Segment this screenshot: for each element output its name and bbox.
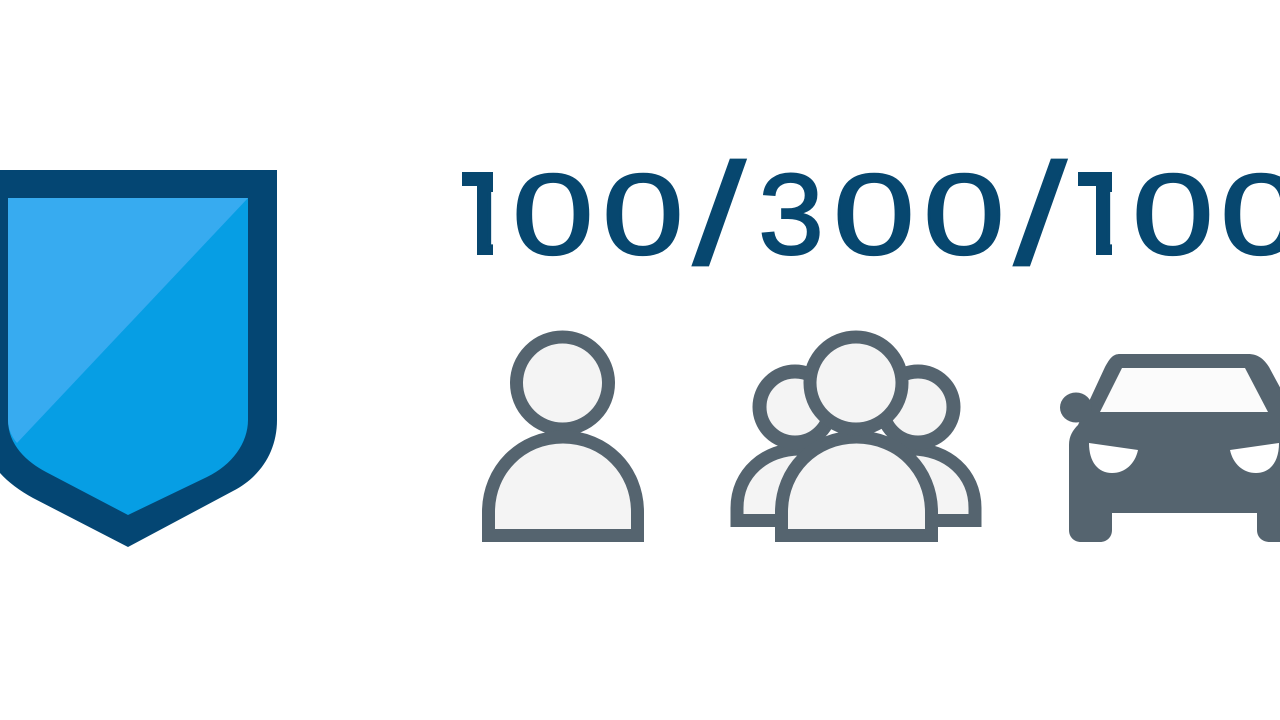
heading: coverage limits 100/300/100	[462, 158, 1280, 266]
heading: coverage limits 100/300/100: 1	[411, 150, 539, 279]
heading: coverage limits 100/300/100: 00	[512, 150, 684, 278]
icon: car	[1060, 354, 1280, 542]
heading: coverage limits 100/300/100: 1	[1030, 150, 1158, 279]
heading: coverage limits 100/300/100: /	[693, 134, 746, 295]
heading: coverage limits 100/300/100: /	[1014, 134, 1067, 295]
heading: coverage limits 100/300/100: 3	[758, 150, 824, 279]
icon: shield	[0, 170, 277, 547]
infographic canvas	[0, 158, 1280, 547]
icon: single person	[488, 337, 638, 536]
heading: coverage limits 100/300/100: 00	[833, 150, 1005, 278]
icon: group of people	[737, 337, 975, 536]
